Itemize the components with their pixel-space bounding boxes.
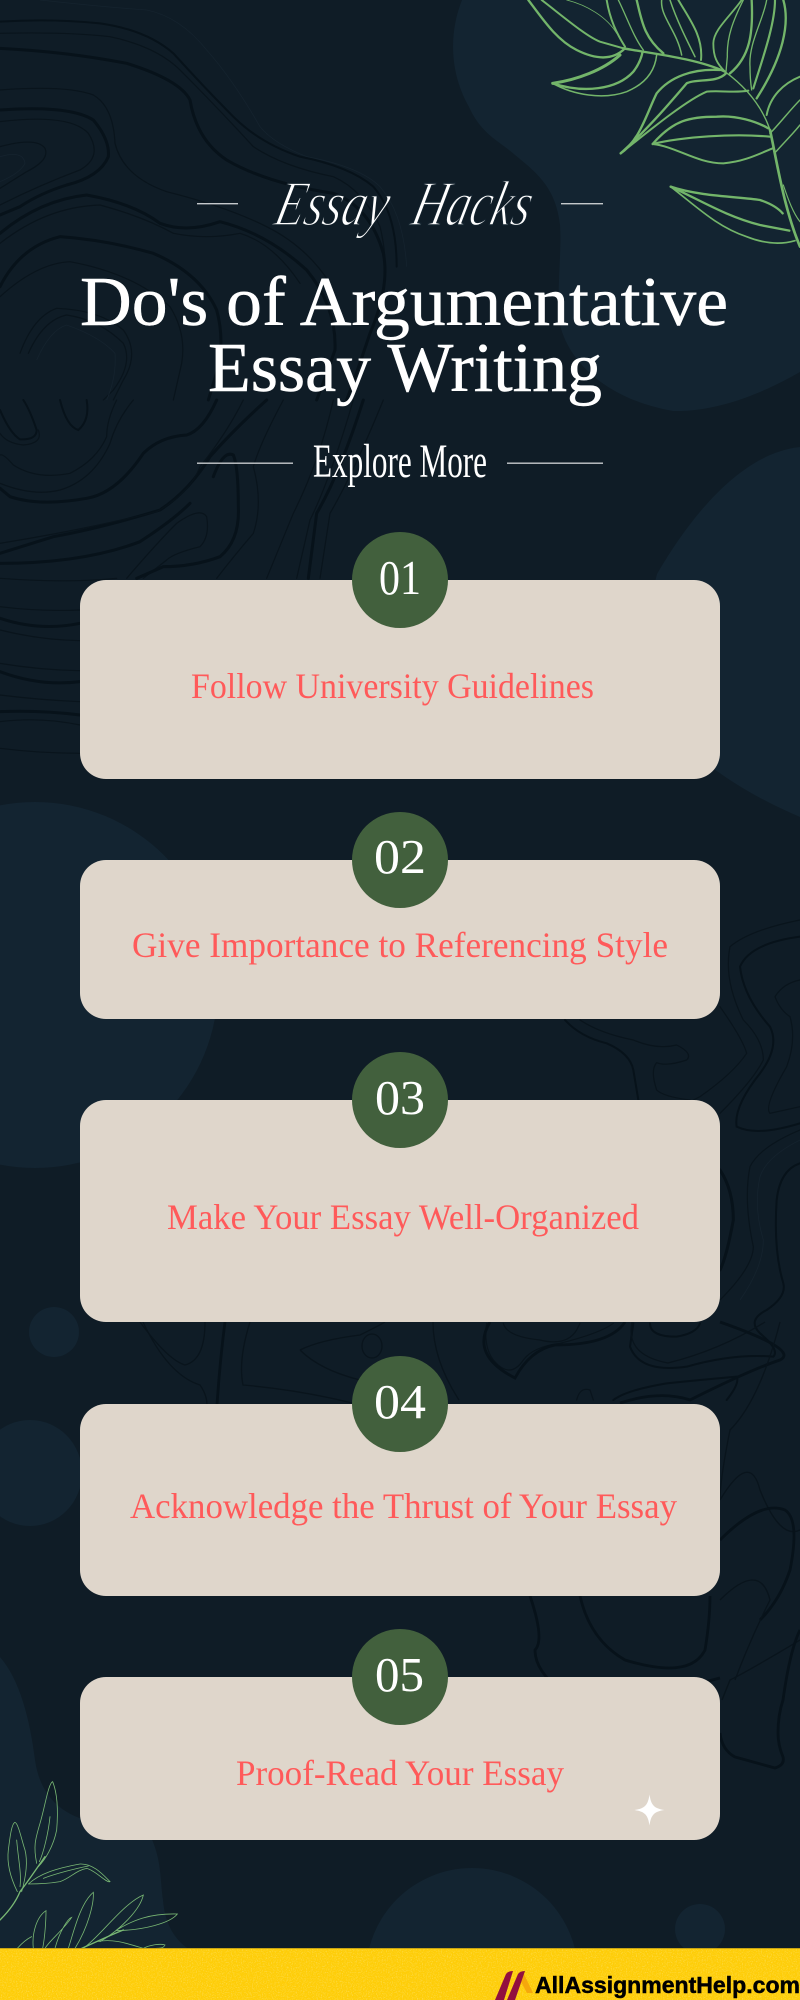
panel: step 1: Follow University Guidelines [191,666,594,706]
icon: top right palm leaf [528,0,800,247]
eyebrow: Essay Hacks: Essay [268,169,398,240]
eyebrow: Essay Hacks [197,169,603,240]
panel: step 2: Give Importance to Referencing Style [132,925,668,965]
panel: step 5: Proof-Read Your Essay [236,1753,564,1793]
icon: bottom left leaves [0,1782,177,1948]
panel: step 5 [80,1629,720,1840]
title: Do's of Argumentative [80,264,728,341]
panel: step 3: 03 [375,1070,425,1125]
panel: step 4 [80,1356,720,1596]
title: Essay Writing [208,330,602,407]
panel: step 2: 02 [374,829,426,884]
panel: step 4: 04 [374,1374,426,1429]
icon: sparkle star [634,1794,664,1826]
eyebrow: Essay Hacks: Hacks [405,169,541,240]
panel: step 1 [80,532,720,779]
panel: step 5: 05 [375,1647,424,1702]
panel: step 4: Acknowledge the Thrust of Your Essay [130,1486,677,1526]
panel: step 3: Make Your Essay Well-Organized [167,1197,639,1237]
topographic contour lines: right middle [486,920,800,1400]
subheading: Explore More: Explore More [313,435,487,488]
topographic contour lines: left middle [0,400,383,753]
footer band [0,1948,800,2000]
logo: AllAssignmentHelp.com: AllAssignmentHelp.com [535,1972,800,1998]
panel: step 1: 01 [379,550,421,605]
panel: step 2 [80,812,720,1019]
title [80,264,728,407]
panel: step 3 [80,1052,720,1322]
topographic contour lines: top left [0,0,407,400]
topographic contour lines: lower right [140,1322,800,1768]
